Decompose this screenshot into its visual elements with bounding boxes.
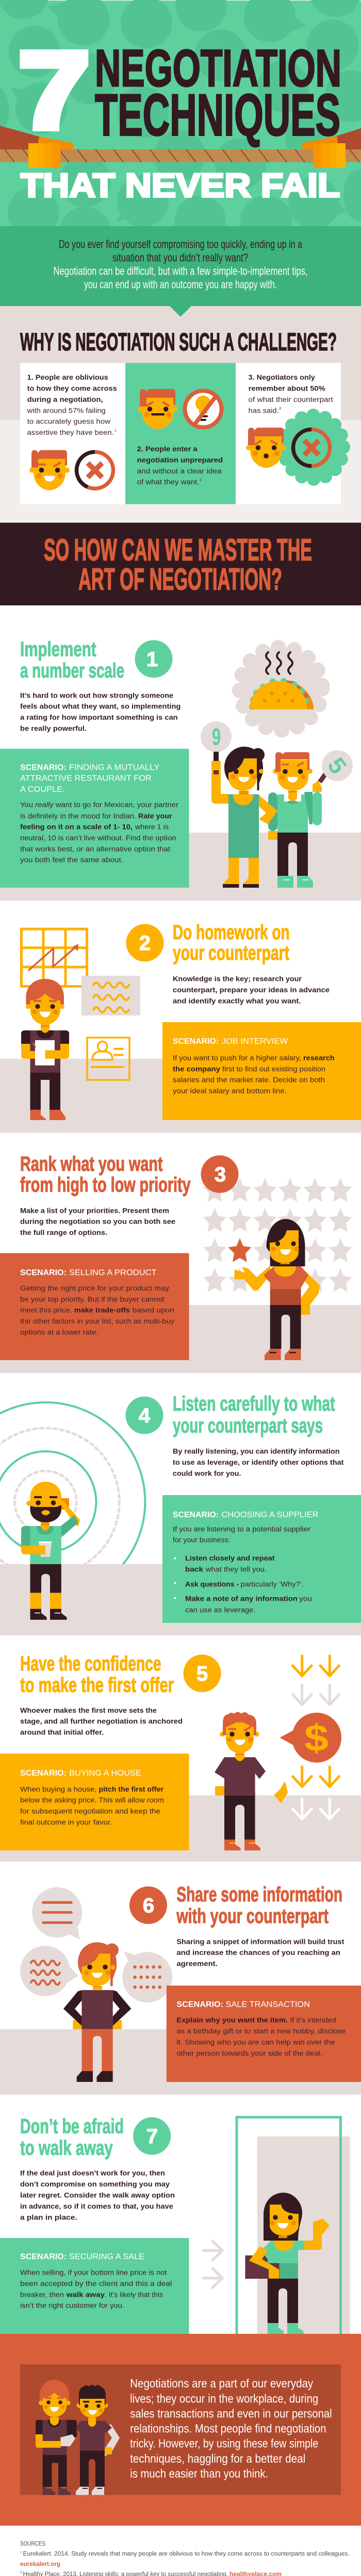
title numeral: 7: 7 bbox=[19, 29, 90, 151]
illustration: bearded man on phone bbox=[21, 1482, 80, 1620]
text: challenge 2: 2. People enter a bbox=[137, 445, 198, 453]
panel: scenario job interview: salaries and the market rate. Decide on both bbox=[173, 1076, 325, 1084]
heading: implement a number scale: a number scale bbox=[20, 659, 124, 682]
icon: CV card bbox=[87, 1038, 129, 1080]
panel: scenario selling a product: make trade-offs bbox=[74, 1307, 130, 1314]
section 3: rank priorities bbox=[0, 1153, 361, 1373]
panel: scenario choosing a supplier: for your business: bbox=[173, 1536, 231, 1544]
text: challenge 3: remember about 50% bbox=[249, 384, 325, 392]
panel: scenario securing a sale bbox=[0, 2238, 189, 2334]
panel: scenario selling a product: based upon bbox=[133, 1307, 174, 1314]
text: intro promise bbox=[54, 265, 307, 291]
text block: sources: SOURCES bbox=[20, 2541, 45, 2547]
banner: so how can we master bbox=[0, 522, 361, 605]
section 4: listen carefully bbox=[0, 1393, 361, 1635]
text: technique 7 description: a plan in place. bbox=[20, 2213, 77, 2221]
text: closing paragraph: relationships. Most people find negotiation bbox=[130, 2421, 326, 2435]
heading: do homework on your counterpart bbox=[173, 921, 290, 964]
heading: don't be afraid bbox=[20, 2115, 124, 2159]
panel: scenario restaurant: SCENARIO: bbox=[20, 763, 67, 772]
text: challenge 3: 3. Negotiators only bbox=[249, 374, 315, 381]
illustration: woman holding number 9 bbox=[201, 721, 277, 888]
panel: scenario sale transaction: If it’s intended bbox=[290, 2016, 336, 2024]
illustration: left hand pulling rope bbox=[0, 126, 74, 168]
section 2: homework bbox=[0, 921, 361, 1133]
text block: sources: 1 bbox=[20, 2551, 22, 2554]
text: intro question bbox=[59, 238, 303, 264]
panel: scenario restaurant: feeling on it on a scale of 1- 10, bbox=[20, 823, 133, 831]
panel: scenario restaurant: FINDING A MUTUALLY bbox=[69, 763, 160, 772]
panel: scenario choosing a supplier bbox=[162, 1495, 361, 1623]
text: technique 4 description: could work for you. bbox=[173, 1469, 241, 1477]
illustration: woman pointing to star bbox=[234, 1219, 320, 1360]
text: challenge 3: 3 bbox=[279, 407, 281, 411]
panel: scenario choosing a supplier: particularly ‘Why?’. bbox=[240, 1580, 304, 1588]
text: technique 3 description: Make a list of your priorities. Present them bbox=[20, 1207, 169, 1214]
illustration: man pointing up bbox=[206, 1712, 288, 1851]
section 7: walk away bbox=[0, 2115, 350, 2334]
text: intro question: situation that you didn’t really want? bbox=[112, 251, 248, 264]
panel: scenario choosing a supplier: Listen closely and repeat bbox=[185, 1554, 275, 1562]
panel: scenario selling a product: the other factors in your list, such as multi-buy bbox=[20, 1317, 174, 1325]
icon: speech bubble with waves bbox=[20, 1946, 78, 1996]
text: technique 4 description: By really listening, you can identify information bbox=[173, 1448, 339, 1455]
panel: scenario job interview: the company bbox=[173, 1065, 221, 1073]
heading: have the confidence bbox=[20, 1653, 174, 1697]
text: challenge 2: negotiation unprepared bbox=[137, 456, 223, 464]
text block: sources: eurekalert.org bbox=[20, 2562, 60, 2568]
icon: rising chart bbox=[22, 929, 87, 986]
illustration: man holding number 5 bbox=[268, 750, 353, 888]
panel: scenario sale transaction: other person towards your side of the deal. bbox=[176, 2049, 322, 2057]
panel: scenario sale transaction: SCENARIO: bbox=[176, 2001, 223, 2009]
panel: scenario sale transaction: it. Showing who you are can help win over the bbox=[176, 2038, 335, 2046]
panel: scenario job interview: If you want to push for a higher salary, bbox=[173, 1054, 301, 1062]
panel: three challenges bbox=[20, 363, 343, 504]
text: technique 1 description: feels about what they want, so implementing bbox=[20, 703, 180, 710]
panel: scenario job interview: SCENARIO: bbox=[173, 1037, 219, 1046]
text: technique 7 description: If the deal just doesn’t work for you, then bbox=[20, 2170, 165, 2177]
panel: scenario buying a house: When buying a house, bbox=[20, 1785, 97, 1793]
badge: number 6 bbox=[129, 1887, 167, 1924]
section 5: first offer bbox=[0, 1653, 361, 1861]
icon: notes card bbox=[81, 976, 140, 1015]
panel: scenario restaurant: you both feel the same about. bbox=[20, 856, 123, 864]
illustration: man holding number 5: 5 bbox=[322, 753, 352, 778]
text: challenge 2: of what they want. bbox=[137, 478, 200, 486]
badge: number 6: 6 bbox=[143, 1894, 154, 1917]
section 6: share information bbox=[0, 1884, 361, 2095]
heading: rank what you want bbox=[20, 1153, 191, 1196]
text: challenge 1: to how they come across bbox=[27, 384, 117, 392]
heading: don't be afraid: Don’t be afraid bbox=[20, 2115, 124, 2138]
panel: scenario restaurant: Rate your bbox=[138, 812, 172, 820]
heading: implement a number scale bbox=[20, 638, 124, 682]
panel: scenario job interview: first to find out existing position bbox=[222, 1065, 325, 1073]
panel: scenario choosing a supplier: Make a note of any information bbox=[185, 1595, 298, 1603]
text: challenge 1: 1. People are oblivious bbox=[27, 374, 108, 381]
panel: scenario buying a house: for subsequent negotiation and keep the bbox=[20, 1807, 160, 1815]
badge: number 2: 2 bbox=[139, 932, 151, 955]
panel: scenario choosing a supplier: can use as leverage. bbox=[185, 1606, 256, 1614]
text: technique 7 description: in advance, so if it comes to that, you have bbox=[20, 2202, 173, 2210]
badge: number 7: 7 bbox=[146, 2125, 158, 2148]
text: closing paragraph: techniques, haggling for a better deal bbox=[130, 2452, 305, 2465]
panel: scenario buying a house: final outcome in your favor. bbox=[20, 1819, 112, 1826]
text: closing paragraph: sales transactions and even in our personal bbox=[130, 2406, 332, 2420]
text: technique 1 description: be really powerful. bbox=[20, 724, 87, 732]
icon: green scalloped badge bbox=[284, 415, 343, 479]
text: challenge 3: of what their counterpart bbox=[249, 396, 333, 403]
panel: scenario selling a product: meet this price, bbox=[20, 1307, 72, 1314]
panel: scenario sale transaction: as a birthday gift or to start a new hobby, disclose bbox=[176, 2027, 346, 2035]
icon: crossed-out light bulb bbox=[185, 391, 222, 428]
panel: scenario selling a product bbox=[0, 1253, 189, 1360]
icon: downward arrows bbox=[293, 1656, 339, 1819]
text: technique 7 description: later regret. Consider the walk away option bbox=[20, 2192, 175, 2199]
text: challenge 2: 2 bbox=[200, 479, 202, 482]
panel: scenario choosing a supplier: back bbox=[185, 1565, 204, 1573]
panel: scenario sale transaction: SALE TRANSACTION bbox=[226, 2001, 310, 2009]
text: challenge 1: during a negotiation, bbox=[27, 396, 103, 403]
text: challenge 2 bbox=[137, 445, 223, 486]
panel: scenario sale transaction: Explain why you want the item. bbox=[176, 2016, 288, 2024]
text: technique 6 description bbox=[176, 1938, 344, 1968]
icon: 43 percent ring with cross bbox=[76, 452, 113, 488]
text: technique 5 description: around that initial offer. bbox=[20, 1728, 104, 1736]
icon: dollar speech bubble bbox=[280, 1713, 341, 1762]
text: technique 3 description: the full range of options. bbox=[20, 1229, 107, 1236]
text: challenge 3: has said. bbox=[249, 406, 279, 414]
illustration: man with clipboard bbox=[21, 979, 69, 1120]
illustration: sound rings bbox=[0, 1401, 146, 1564]
panel: scenario job interview bbox=[162, 1022, 361, 1120]
panel: scenario securing a sale: When selling, if your bottom line price is not bbox=[20, 2269, 167, 2277]
text: challenge 1: with around 57% failing bbox=[27, 406, 106, 414]
badge: number 1 bbox=[135, 640, 172, 678]
text: challenge 2: and without a clear idea bbox=[137, 467, 222, 475]
text: technique 1 description: It’s hard to work out how strongly someone bbox=[20, 691, 174, 699]
text: technique 3 description bbox=[20, 1207, 176, 1236]
icon: speech bubble with lines bbox=[32, 1887, 82, 1940]
panel: scenario buying a house bbox=[0, 1754, 189, 1851]
panel: scenario choosing a supplier: you bbox=[299, 1595, 312, 1603]
text: technique 2 description: counterpart, prepare your ideas in advance bbox=[173, 986, 330, 994]
panel: scenario restaurant bbox=[0, 749, 189, 888]
text: technique 2 description: and identify exactly what you want. bbox=[173, 997, 301, 1005]
panel: scenario restaurant: neutral, 10 is can’t live without. Find the option bbox=[20, 834, 176, 842]
illustration: woman walking away bbox=[245, 2193, 330, 2334]
panel: scenario choosing a supplier: SCENARIO: bbox=[173, 1511, 219, 1519]
text: closing paragraph: tricky. However, by using these few simple bbox=[130, 2436, 318, 2450]
panel: scenario restaurant: You really want to go for Mexican, your partner bbox=[20, 801, 179, 809]
panel: scenario securing a sale: been accepted by the client and this a deal bbox=[20, 2280, 172, 2287]
text: technique 5 description: Whoever makes the first move sets the bbox=[20, 1706, 157, 1714]
panel: scenario job interview: JOB INTERVIEW bbox=[222, 1037, 288, 1046]
panel: scenario restaurant: A COUPLE. bbox=[20, 785, 65, 794]
title: that never fail: THAT NEVER FAIL bbox=[21, 166, 340, 204]
panel: scenario sale transaction bbox=[167, 1986, 361, 2082]
panel: scenario choosing a supplier: what they tell you. bbox=[205, 1565, 267, 1573]
panel: scenario buying a house: below the asking price. This will allow room bbox=[20, 1797, 164, 1804]
text: technique 5 description: stage, and all further negotiation is anchored bbox=[20, 1718, 183, 1725]
icon: speech bubble with dots bbox=[122, 1952, 172, 2003]
panel: scenario buying a house: pitch the first offer bbox=[99, 1785, 164, 1793]
text block: sources: Eurekalert. 2014. Study reveals that many people are oblivious to how they come across to counterparts and colleagues. bbox=[23, 2551, 350, 2557]
icon: star grid bbox=[203, 1178, 352, 1292]
panel: scenario selling a product: be your top priority. But if the buyer cannot bbox=[20, 1295, 165, 1303]
text: technique 7 description: don’t compromise on something you may bbox=[20, 2180, 170, 2188]
panel: scenario securing a sale: walk away bbox=[65, 2291, 105, 2298]
text: technique 7 description bbox=[20, 2170, 175, 2221]
heading: implement a number scale: Implement bbox=[20, 638, 96, 660]
panel: scenario restaurant: where 1 is bbox=[135, 823, 169, 831]
icon: surprised face bbox=[246, 428, 286, 468]
badge: number 4: 4 bbox=[139, 1404, 151, 1427]
text: closing paragraph: Negotiations are a part of our everyday bbox=[130, 2377, 314, 2390]
illustration: rope bbox=[0, 149, 361, 162]
panel: scenario job interview: your ideal salary and bottom line. bbox=[173, 1087, 287, 1095]
icon: thought bubble with taco bbox=[240, 648, 322, 730]
text: technique 2 description: Knowledge is the key; research your bbox=[173, 975, 302, 983]
panel: scenario selling a product: Getting the right price for your product may bbox=[20, 1284, 169, 1292]
badge: number 3 bbox=[201, 1155, 238, 1193]
illustration: right hand pulling rope bbox=[302, 128, 361, 168]
panel: intro band bbox=[0, 226, 361, 317]
panel: scenario selling a product: options at a lower rate. bbox=[20, 1328, 99, 1336]
panel: closing message bbox=[0, 2334, 361, 2526]
panel: scenario buying a house: SCENARIO: bbox=[20, 1769, 67, 1778]
icon: smirking face bbox=[29, 450, 70, 490]
text: challenge 3 bbox=[249, 374, 333, 414]
badge: number 2 bbox=[126, 924, 164, 961]
heading: have the confidence: Have the confidence bbox=[20, 1653, 161, 1675]
illustration: door frame bbox=[237, 2117, 350, 2334]
icon: 50 percent ring with cross bbox=[293, 430, 330, 466]
text: technique 6 description: Sharing a snippet of information will build trust bbox=[176, 1938, 344, 1945]
panel: scenario securing a sale: SECURING A SALE bbox=[69, 2252, 144, 2261]
panel: hero bbox=[0, 0, 361, 226]
heading: don't be afraid: to walk away bbox=[20, 2137, 113, 2159]
badge: number 5: 5 bbox=[196, 1663, 208, 1685]
text: technique 1 description bbox=[20, 691, 180, 732]
title: negotiation techniques bbox=[95, 40, 341, 148]
panel: scenario choosing a supplier: If you are listening to a potential supplier bbox=[173, 1525, 311, 1533]
text: challenge 1: 1 bbox=[114, 429, 117, 433]
icon: dollar speech bubble: $ bbox=[304, 1718, 329, 1759]
heading: rank what you want: Rank what you want bbox=[20, 1153, 163, 1176]
panel: scenario restaurant: that works best, or an alternative option that bbox=[20, 845, 170, 853]
illustration: two men side by side bbox=[36, 2380, 120, 2495]
panel: scenario choosing a supplier: Ask questions - bbox=[185, 1580, 239, 1588]
text: technique 6 description: agreement. bbox=[176, 1960, 218, 1968]
heading: do homework on your counterpart: your counterpart bbox=[173, 942, 289, 964]
section: why negotiation is a challenge bbox=[0, 306, 361, 522]
badge: number 3: 3 bbox=[215, 1163, 226, 1186]
text: challenge 1: assertive they have been. bbox=[27, 429, 114, 436]
panel: scenario securing a sale: . It’s likely that this bbox=[105, 2291, 163, 2298]
panel: scenario selling a product: SCENARIO: bbox=[20, 1268, 67, 1277]
panel: scenario securing a sale: isn’t the right customer for you. bbox=[20, 2302, 124, 2310]
heading: rank what you want: from high to low priority bbox=[20, 1174, 191, 1196]
panel: scenario buying a house: BUYING A HOUSE bbox=[69, 1769, 141, 1778]
text block: sources bbox=[20, 2541, 350, 2576]
panel: scenario selling a product: SELLING A PRODUCT bbox=[69, 1268, 157, 1277]
heading: listen carefully bbox=[173, 1393, 335, 1437]
text: technique 3 description: during the negotiation so you can both see bbox=[20, 1218, 176, 1226]
section 1: number scale bbox=[0, 638, 361, 901]
icon: worried face bbox=[138, 389, 178, 429]
text: technique 2 description bbox=[173, 975, 330, 1005]
panel: scenario restaurant: ATTRACTIVE RESTAURANT FOR bbox=[20, 774, 152, 783]
text: challenge 1 bbox=[27, 374, 117, 436]
badge: number 5 bbox=[184, 1655, 221, 1692]
panel: scenario securing a sale: SCENARIO: bbox=[20, 2252, 67, 2261]
panel: scenario restaurant: is definitely in the mood for Indian. bbox=[20, 812, 136, 820]
text: closing paragraph bbox=[130, 2377, 332, 2480]
text: technique 4 description bbox=[173, 1448, 344, 1477]
text: technique 4 description: to use as leverage, or identify other options that bbox=[173, 1459, 344, 1466]
text: challenge 1: to accurately guess how bbox=[27, 418, 110, 426]
text: technique 1 description: a rating for how important something is can bbox=[20, 714, 178, 721]
illustration: woman talking bbox=[63, 1942, 131, 2082]
text: technique 6 description: and increase the chances of you reaching an bbox=[176, 1949, 340, 1957]
icon: right arrows bbox=[203, 2241, 222, 2287]
heading: share some information bbox=[176, 1884, 342, 1927]
text block: sources: 3 bbox=[20, 2571, 22, 2574]
panel: scenario securing a sale: breaker, then bbox=[20, 2291, 64, 2298]
text: intro promise: you can end up with an outcome you are happy with. bbox=[84, 278, 277, 291]
panel: scenario choosing a supplier: CHOOSING A SUPPLIER bbox=[222, 1511, 318, 1519]
heading: do homework on your counterpart: Do homework on bbox=[173, 921, 290, 944]
text: closing paragraph: is much easier than you think. bbox=[130, 2467, 268, 2480]
badge: number 7 bbox=[133, 2117, 171, 2155]
text: technique 5 description bbox=[20, 1706, 183, 1736]
text: closing paragraph: lives; they occur in the workplace, during bbox=[130, 2392, 318, 2405]
heading: have the confidence: to make the first offer bbox=[20, 1674, 174, 1697]
badge: number 4 bbox=[126, 1396, 163, 1434]
panel: scenario job interview: research bbox=[303, 1054, 335, 1062]
badge: number 1: 1 bbox=[146, 648, 158, 671]
illustration: woman holding number 9: 9 bbox=[212, 723, 221, 750]
